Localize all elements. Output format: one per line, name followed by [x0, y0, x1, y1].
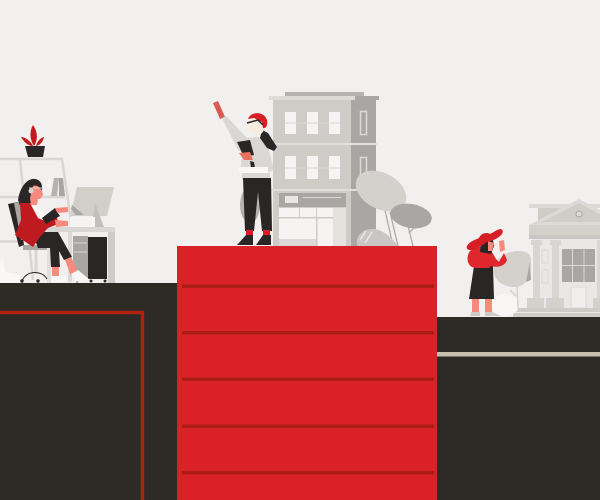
skirt: [469, 266, 494, 299]
lower hand: [55, 220, 68, 227]
white waist band: [239, 167, 268, 173]
ground: red outline inset: [0, 312, 142, 500]
boots: [237, 235, 253, 245]
legs: [472, 299, 492, 313]
raised hand: [213, 101, 225, 119]
beige stripe: [437, 352, 600, 356]
computer monitor: [70, 187, 114, 227]
raised hand with phone: [499, 240, 505, 252]
headset: [28, 188, 34, 194]
trousers: [243, 178, 272, 231]
townhouse building: [269, 92, 379, 246]
red cap: [248, 113, 267, 128]
head: [248, 119, 264, 135]
chair: [8, 202, 24, 247]
woman with red hat: [467, 229, 507, 316]
lower hem: [242, 173, 270, 180]
woman with tablet: [213, 101, 277, 245]
jacket: [15, 203, 58, 247]
hair tail: [260, 130, 277, 151]
ground: left: [0, 283, 177, 500]
hand on tablet: [239, 152, 253, 160]
hair: [480, 240, 494, 254]
shelf: [0, 159, 72, 280]
trees beside building: [240, 162, 434, 246]
potted plant: [21, 125, 45, 157]
head: [30, 186, 43, 205]
raised arm: [222, 116, 249, 156]
ground: right: [437, 317, 600, 500]
desk: [47, 227, 115, 283]
glasses and hair strand: [247, 120, 263, 125]
sweater: [240, 137, 274, 173]
red socks: [246, 230, 270, 235]
books on shelf: [46, 178, 65, 196]
upper hand: [55, 207, 68, 213]
tablet: [237, 140, 254, 156]
hat: [467, 229, 503, 250]
legs: [32, 232, 72, 267]
woman at desk: [8, 179, 90, 283]
glasses band: [29, 187, 43, 189]
shoes: [470, 312, 501, 316]
temple building: [513, 199, 600, 317]
hair: [18, 179, 42, 206]
tree by temple: [491, 251, 531, 316]
blouse: [467, 247, 507, 268]
blouse: [30, 203, 45, 222]
central red block: [177, 246, 437, 500]
tablet strap: [250, 161, 255, 168]
white items on floor: [0, 259, 20, 283]
arm and cuff: [42, 208, 60, 224]
face: [488, 241, 494, 251]
